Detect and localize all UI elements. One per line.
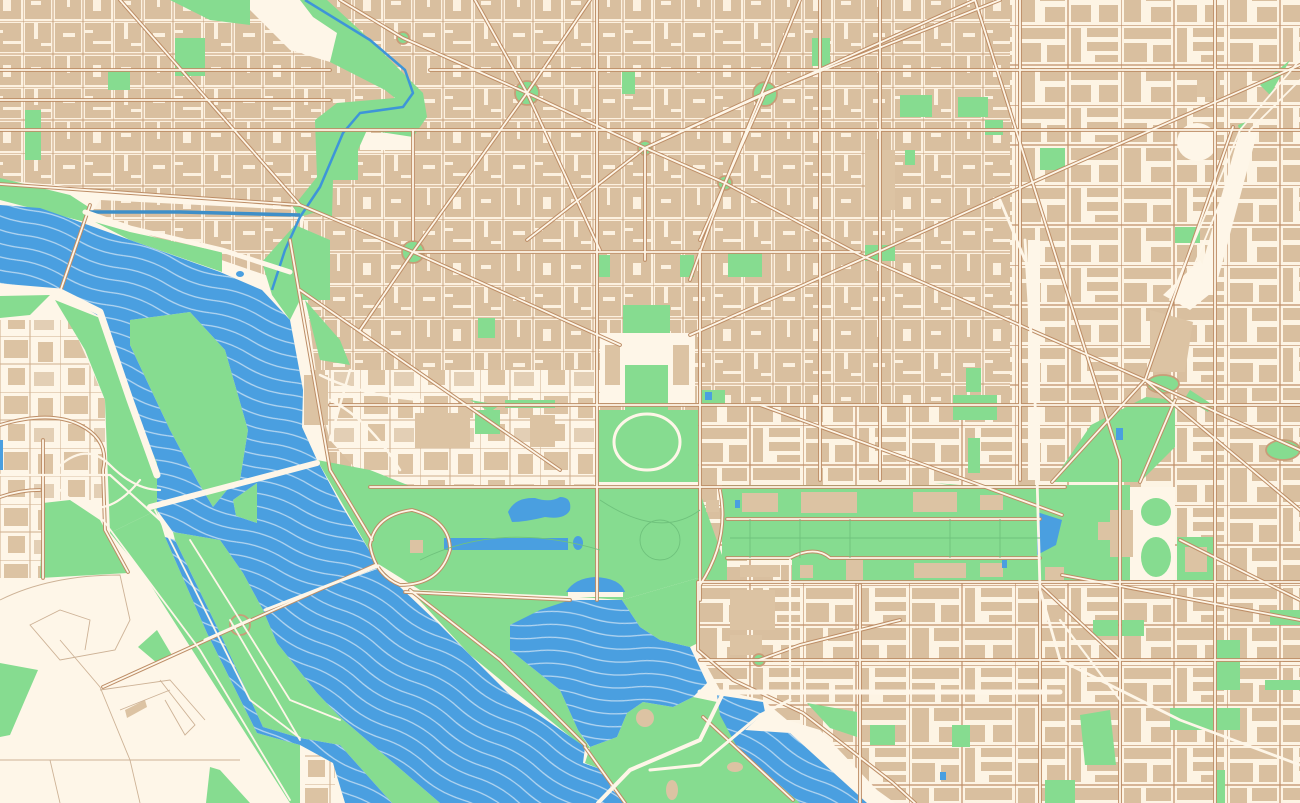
circle: Dupont xyxy=(515,81,539,105)
urban: downtown xyxy=(300,0,1010,480)
park: National Mall east xyxy=(722,485,1065,582)
kutz bridge strip xyxy=(568,592,623,597)
circle: Stanton xyxy=(1147,375,1179,393)
pool: lincoln reflecting xyxy=(444,538,568,550)
park: Roosevelt Island xyxy=(130,312,248,507)
park: White House lawns xyxy=(623,305,670,410)
capitol: lawn north xyxy=(1141,498,1171,526)
park: Arlington xyxy=(40,500,128,578)
highway: I-395 xyxy=(1025,240,1300,765)
park: Capitol north xyxy=(1052,397,1175,482)
park: small island south of bridge xyxy=(233,483,257,523)
circle: Lincoln Park xyxy=(1266,440,1300,460)
park: southwest waterfront xyxy=(807,703,857,737)
park: west shore upper xyxy=(55,300,157,533)
park: National Mall west xyxy=(368,487,722,600)
park: the Ellipse xyxy=(597,410,698,482)
highway: southeast freeway xyxy=(700,690,1060,694)
water: upper river xyxy=(0,205,378,610)
park: Library block xyxy=(1177,537,1215,580)
park: Columbia Island xyxy=(173,532,440,803)
circle: Washington xyxy=(402,241,424,263)
washington channel xyxy=(717,695,867,803)
ponds and reflecting pools xyxy=(0,271,1123,780)
pond: constitution gardens xyxy=(508,497,570,522)
circle: Scott xyxy=(638,141,652,155)
highway: Roosevelt Bridge xyxy=(150,463,317,507)
tidal basin xyxy=(510,600,707,747)
park: triangle north of Penn Ave xyxy=(934,483,1064,512)
capitol: plaza xyxy=(1130,487,1175,580)
rail yard lines xyxy=(1170,60,1300,300)
circle: southwest xyxy=(753,654,765,666)
highway: Memorial Bridge edges xyxy=(205,566,378,640)
highway: bridges south xyxy=(598,695,722,803)
urban: northwest xyxy=(0,0,330,208)
park: upper corner xyxy=(170,0,250,25)
canal: C and O xyxy=(85,212,300,215)
mall paths xyxy=(420,500,1040,560)
circle: Arlington xyxy=(230,615,250,635)
pond: kutz inlet xyxy=(566,577,625,592)
park: Hains Point xyxy=(585,697,800,803)
highway: Rosslyn interchange xyxy=(0,454,160,520)
capitol: lawn south xyxy=(1141,537,1171,577)
highway: center interchange xyxy=(320,370,420,470)
urban: Rosslyn xyxy=(0,320,105,500)
creek: Rock Creek xyxy=(272,0,413,290)
capitol: building xyxy=(1098,510,1133,557)
pond: small pools xyxy=(236,271,244,277)
park: Rock Creek xyxy=(293,0,427,217)
ellipse south of White House xyxy=(614,414,680,470)
water: boundary channel xyxy=(165,537,392,803)
creek and canal xyxy=(85,0,413,290)
circle: upper left xyxy=(397,32,409,44)
park: East Potomac xyxy=(410,590,590,748)
circle: Logan xyxy=(753,82,777,106)
water: lower river xyxy=(263,568,627,803)
highway: river parkway xyxy=(0,287,157,475)
cream open areas xyxy=(240,0,1258,480)
river Potomac xyxy=(0,205,627,803)
pond: capitol reflecting xyxy=(1037,512,1062,555)
urban: east and south xyxy=(698,0,1300,803)
large buildings xyxy=(125,80,1220,800)
circles xyxy=(230,32,1300,666)
highway: parkway ramps xyxy=(103,510,340,800)
circle: Thomas xyxy=(718,176,732,190)
urban: Foggy Bottom xyxy=(310,370,600,485)
park: Capitol grounds xyxy=(1065,485,1133,582)
capitol complex xyxy=(1098,487,1175,580)
park: river bank xyxy=(0,178,90,222)
park: east of Tidal Basin xyxy=(622,578,698,647)
urban: marina xyxy=(305,750,335,803)
park: west strip xyxy=(110,510,300,803)
arlington cemetery roads xyxy=(0,575,240,803)
urban: north bank xyxy=(90,200,300,280)
